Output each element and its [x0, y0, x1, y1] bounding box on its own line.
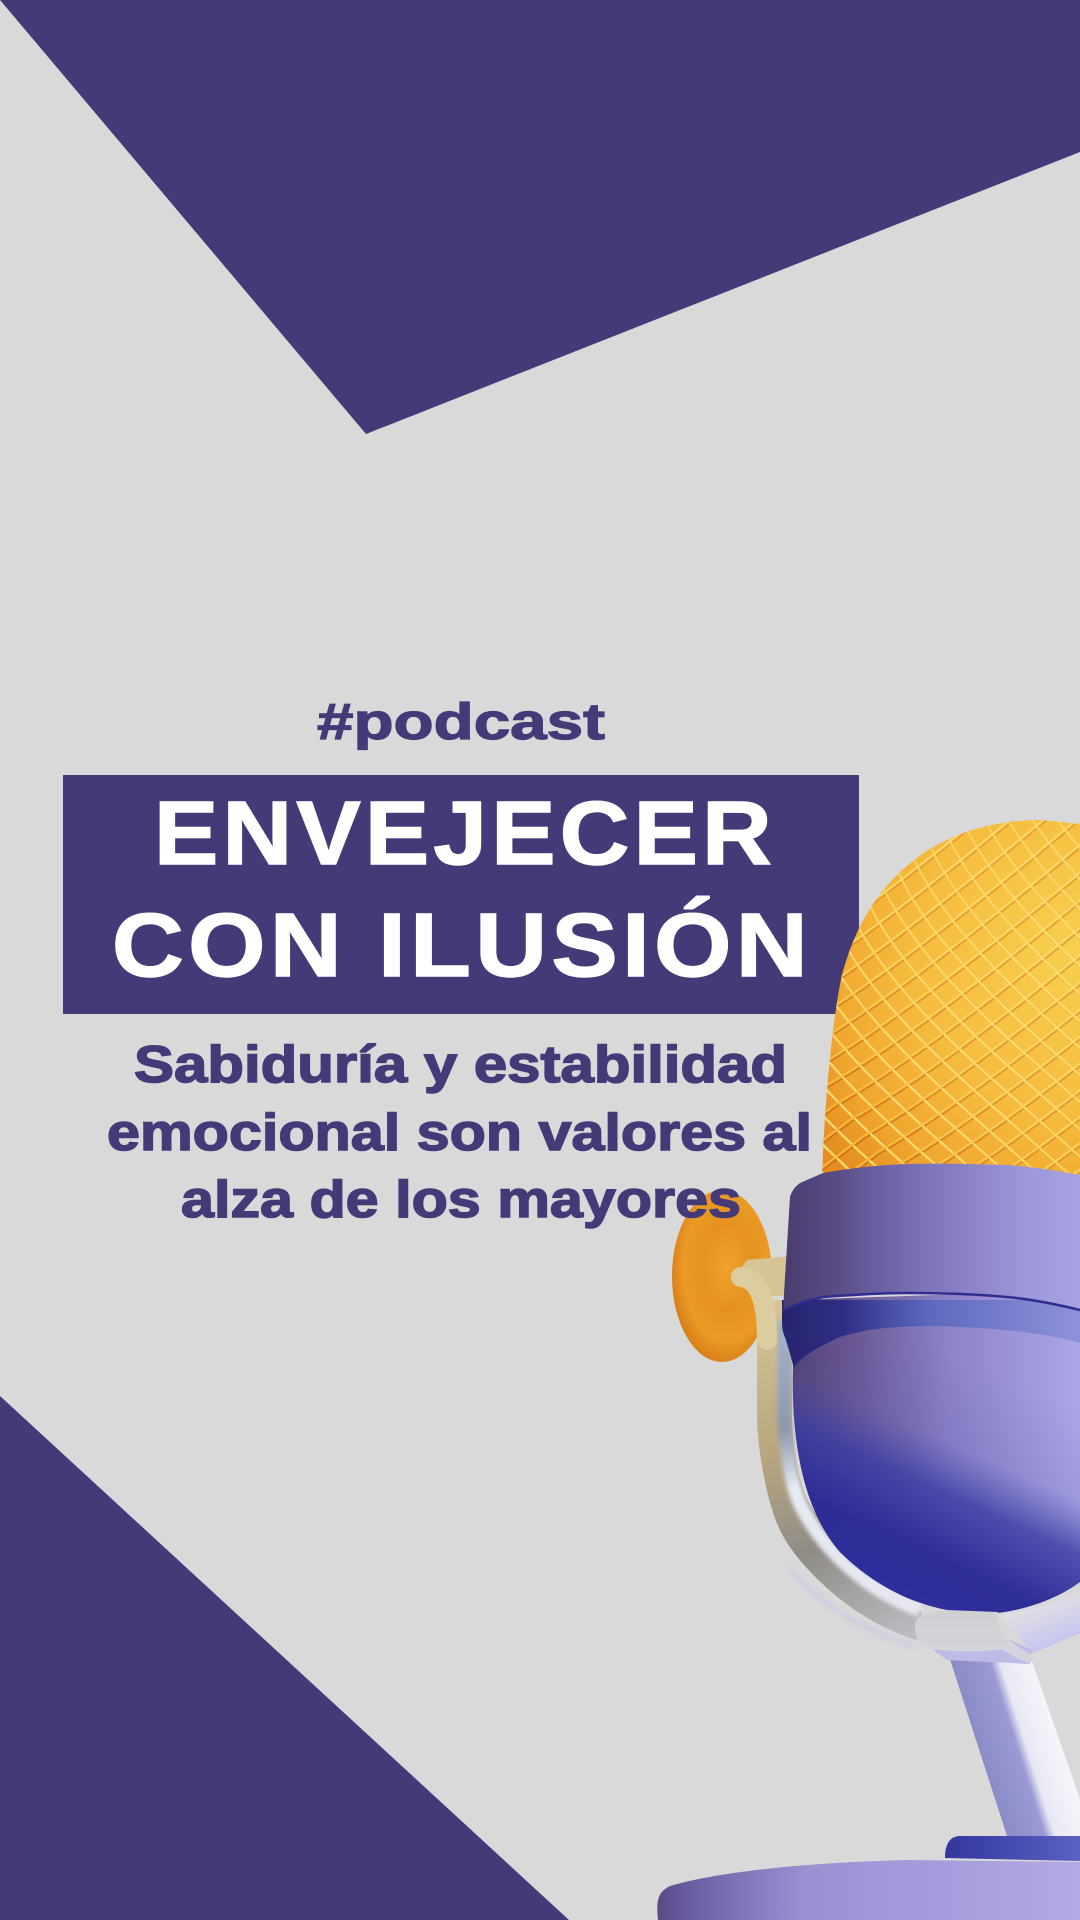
hashtag: #podcast — [317, 693, 605, 750]
microphone base ring — [945, 1836, 1080, 1861]
bottom purple triangle — [0, 1396, 569, 1920]
title line 1: ENVEJECER — [154, 784, 776, 884]
microphone knob connector — [741, 1256, 790, 1340]
microphone clamp — [915, 1610, 1034, 1664]
subtitle line 3: alza de los mayores — [181, 1171, 741, 1229]
microphone illustration — [657, 820, 1080, 1920]
subtitle line 2: emocional son valores al — [107, 1104, 812, 1162]
microphone left arm — [757, 1300, 922, 1646]
microphone base disc — [657, 1860, 1080, 1920]
top purple polygon — [0, 0, 1080, 434]
microphone knob — [672, 1190, 772, 1362]
title banner — [63, 775, 859, 1014]
subtitle — [107, 1036, 812, 1229]
subtitle line 1: Sabiduría y estabilidad — [134, 1036, 787, 1094]
microphone collar — [782, 1164, 1080, 1368]
title line 2: CON ILUSIÓN — [112, 895, 812, 996]
microphone stem — [947, 1650, 1080, 1836]
microphone right arm — [1000, 1593, 1080, 1653]
microphone grille — [822, 820, 1080, 1175]
microphone body — [780, 1290, 1080, 1620]
